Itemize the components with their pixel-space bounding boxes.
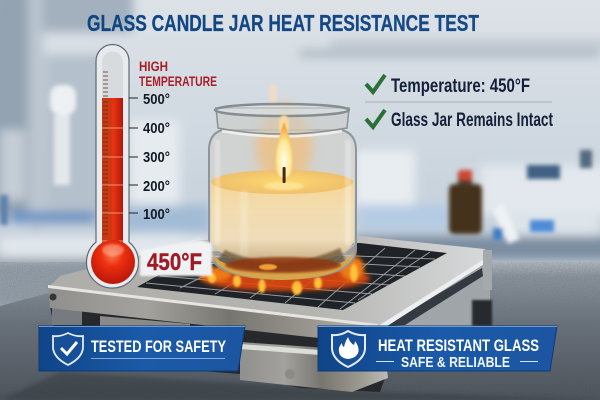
hot plate right edge [378,254,492,330]
badge: heat resistant glass: SAFE & RELIABLE [401,354,510,371]
icon: shield flame [332,331,365,367]
hot plate top surface [48,236,492,326]
jar highlights [215,140,351,255]
countertop [0,262,600,400]
thermometer scale labels: 100° [143,206,170,223]
hot plate lower body [50,306,385,392]
hot plate side [372,255,490,340]
badge: tested for safety [39,326,245,371]
thermometer red column [102,98,123,250]
flame reflection above jar [269,84,277,102]
candle wax [211,170,354,271]
thermometer glass [86,44,138,288]
candle flame [264,115,304,190]
thermometer scale labels: 300° [143,149,170,166]
hot plate front strip [48,286,378,344]
title: GLASS CANDLE JAR HEAT RESISTANCE TEST [87,10,479,36]
thermometer tick marks [103,72,108,234]
thermometer scale pointers [129,98,138,213]
label: high temperature [139,58,217,89]
thermometer scale labels: 200° [143,178,170,195]
thermometer scale labels [143,91,170,223]
check: temperature [366,75,530,97]
jar glass body [209,130,356,279]
check: glass jar [366,110,553,131]
thermometer bulb [91,240,135,284]
icon: shield check [53,333,83,365]
flames [208,264,358,295]
temperature readout: 450°F: 450°F [147,249,202,276]
badge: heat resistant glass: HEAT RESISTANT GLASS [378,336,539,355]
badge: heat resistant glass [318,326,557,371]
hot plate feet and shadow [0,372,600,400]
check: temperature: Temperature: 450°F [391,76,530,97]
thermometer scale labels: 400° [143,120,170,137]
thermometer [86,44,138,288]
wire grid [137,243,447,310]
thermometer scale labels: 500° [143,91,170,108]
background: brown bottle [449,170,482,234]
label: high temperature: TEMPERATURE [139,73,217,89]
checklist [365,75,553,131]
label: high temperature: HIGH [139,58,168,74]
fire glow [199,256,370,291]
hot plate [0,236,600,400]
jar base [212,250,354,280]
temperature readout: 450°F [140,240,212,276]
jar neck and rim [215,104,349,136]
flame glow [256,103,312,187]
badge: tested for safety: TESTED FOR SAFETY [91,338,226,356]
candle jar [209,84,356,280]
